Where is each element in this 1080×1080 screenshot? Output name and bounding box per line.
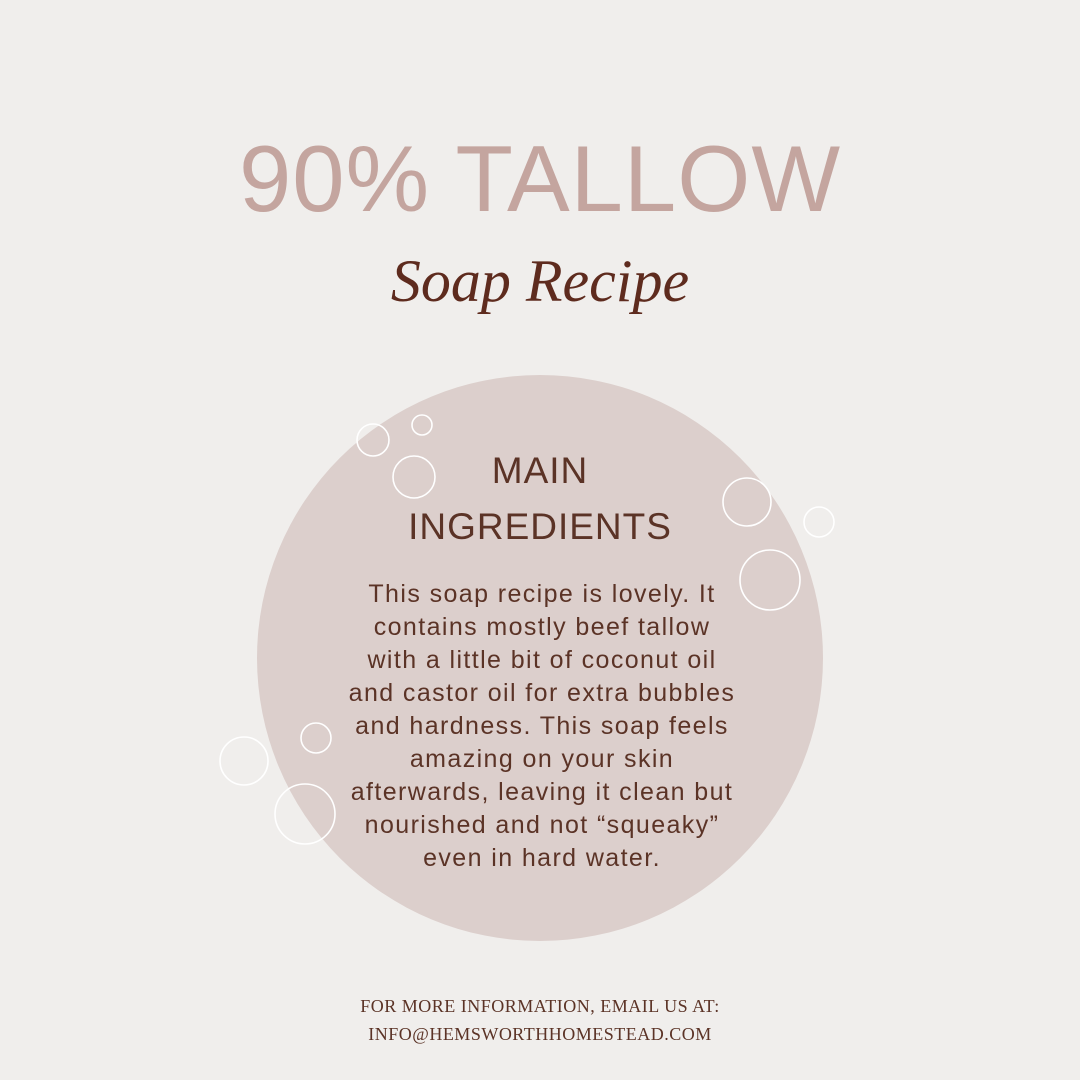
footer contact: INFO@HEMSWORTHHOMESTEAD.COM bbox=[368, 1024, 712, 1044]
body text: amazing on your skin bbox=[410, 745, 674, 773]
footer contact: FOR MORE INFORMATION, EMAIL US AT: bbox=[360, 996, 720, 1016]
footer contact bbox=[360, 996, 720, 1044]
body text: even in hard water. bbox=[423, 844, 661, 872]
heading: main ingredients: INGREDIENTS bbox=[408, 506, 672, 547]
title: 90% TALLOW bbox=[239, 126, 841, 231]
heading: main ingredients bbox=[408, 450, 672, 547]
script subtitle: Soap Recipe bbox=[391, 248, 689, 314]
panel: main ingredients circle bbox=[257, 375, 823, 941]
body text: contains mostly beef tallow bbox=[374, 613, 710, 641]
body text: This soap recipe is lovely. It bbox=[368, 580, 716, 608]
body text: and castor oil for extra bubbles bbox=[349, 679, 735, 707]
heading: main ingredients: MAIN bbox=[492, 450, 588, 491]
body text: afterwards, leaving it clean but bbox=[351, 778, 733, 806]
body text bbox=[349, 580, 735, 872]
body text: nourished and not “squeaky” bbox=[365, 811, 719, 839]
body text: and hardness. This soap feels bbox=[355, 712, 729, 740]
body text: with a little bit of coconut oil bbox=[367, 646, 717, 674]
